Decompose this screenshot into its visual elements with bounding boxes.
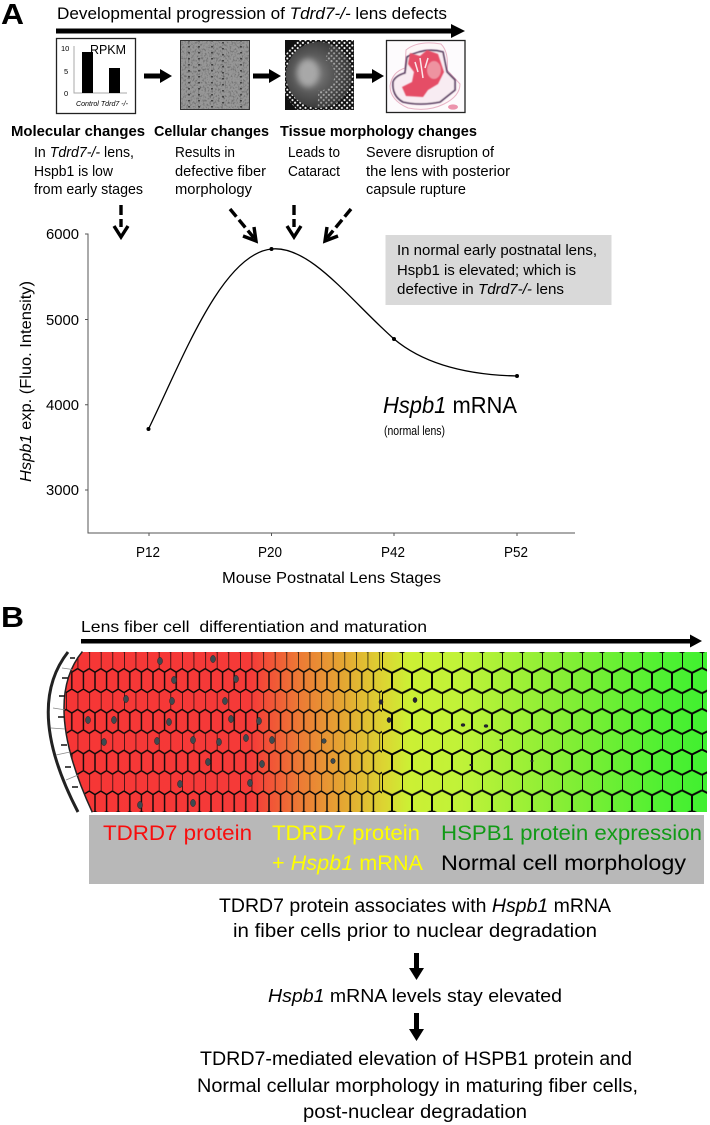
image: RPKM bar chart: 5: [64, 67, 68, 76]
text: cellular description: defective fiber: [175, 164, 266, 180]
legend: normal cell morphology: Normal cell morphology: [441, 851, 686, 875]
text: outcome: [197, 1049, 638, 1123]
x axis title: Mouse Postnatal Lens Stages: [222, 570, 441, 587]
heading: molecular changes: Molecular changes: [11, 123, 145, 140]
axes: [85, 234, 575, 536]
x axis tick labels: P52: [504, 545, 528, 561]
text: cellular description: [175, 145, 266, 198]
text: disruption description: Severe disruption of: [366, 145, 495, 161]
legend panel: [89, 815, 704, 884]
arrow: leads to HSPB1 protein: [409, 1013, 424, 1041]
series label: Hspb1 mRNA: [383, 392, 517, 418]
panel label B: B: [1, 602, 24, 634]
cell nuclei: [86, 655, 534, 809]
y axis tick labels: 5000: [46, 312, 79, 329]
arrow: leads to elevated mRNA: [409, 953, 424, 980]
x axis tick labels: P42: [381, 545, 405, 561]
data curve: [148, 249, 517, 429]
legend: HSPB1 protein expression: HSPB1 protein expression: [441, 821, 702, 845]
text: outcome: Normal cellular morphology in maturing fiber cells,: [197, 1076, 638, 1097]
image: RPKM bar chart: 0: [64, 89, 68, 98]
image: RPKM bar chart: Control Tdrd7 -/-: [76, 99, 128, 108]
legend: TDRD7 protein plus Hspb1 mRNA: [272, 821, 424, 875]
y axis tick labels: 3000: [46, 482, 79, 499]
text: cellular description: Results in: [175, 145, 235, 161]
arrow: molecular to cellular: [144, 69, 172, 83]
text: molecular description: Hspb1 is low: [34, 164, 114, 180]
line chart: Hspb1 mRNA in normal lens: [18, 226, 575, 587]
text: cataract description: Leads to: [288, 145, 340, 161]
image: cataract lens: [285, 40, 354, 110]
arrow: progression timeline: [56, 24, 465, 38]
text: Hspb1 mRNA stays elevated: Hspb1 mRNA levels stay elevated: [268, 985, 562, 1006]
dashed arrow: to P12: [114, 205, 128, 237]
callout: normal early postnatal lens: defective in Tdrd7-/- lens: [397, 282, 564, 298]
text: molecular description: In Tdrd7-/- lens,: [34, 145, 134, 161]
series sublabel: (normal lens): [384, 423, 445, 438]
text: outcome: TDRD7-mediated elevation of HSPB1 protein and: [200, 1049, 632, 1070]
text: outcome: post-nuclear degradation: [303, 1102, 527, 1123]
text: TDRD7 associates with Hspb1 mRNA: [219, 896, 611, 942]
image: RPKM bar chart: [56, 38, 136, 114]
text: molecular description: from early stages: [34, 182, 143, 198]
arrow: cellular to tissue: [253, 69, 281, 83]
diagram: lens fiber cells: [40, 652, 707, 812]
dashed arrow: to P20 top: [287, 205, 301, 237]
data points: [146, 247, 519, 431]
lens capsule and epithelium: [48, 652, 96, 812]
y axis tick labels: [46, 226, 79, 499]
callout: normal early postnatal lens: Hspb1 is elevated; which is: [397, 263, 576, 279]
panel A: developmental progression and Hspb1 chart: [1, 0, 612, 587]
heading: tissue morphology changes: Tissue morphology changes: [280, 123, 477, 140]
heading: lens fiber cell differentiation: Lens fiber cell differentiation and maturation: [81, 619, 427, 636]
text: disruption description: the lens with posterior: [366, 164, 510, 180]
image: ruptured lens histology: [386, 40, 465, 112]
heading: developmental progression: Developmental progression of Tdrd7-/- lens defects: [57, 5, 447, 23]
panel B: lens fiber cell differentiation: [1, 602, 707, 1123]
text: cataract description: Cataract: [288, 164, 340, 180]
dashed arrow: to P20 right: [325, 209, 351, 241]
arrow: tissue to rupture: [356, 69, 384, 83]
text: TDRD7 associates with Hspb1 mRNA: TDRD7 protein associates with Hspb1 mRNA: [219, 896, 611, 917]
arrow: maturation direction: [81, 634, 702, 648]
text: cataract description: [288, 145, 340, 180]
text: disruption description: capsule rupture: [366, 182, 466, 198]
callout: normal early postnatal lens: In normal early postnatal lens,: [397, 243, 597, 259]
legend: TDRD7 protein plus Hspb1 mRNA: TDRD7 protein: [272, 821, 420, 845]
x axis tick labels: P20: [258, 545, 282, 561]
image: fiber cell micrograph: [180, 40, 250, 110]
x axis tick labels: P12: [136, 545, 160, 561]
image: RPKM bar chart: 10: [61, 44, 69, 53]
heading: cellular changes: Cellular changes: [154, 123, 269, 140]
y axis title: Hspb1 exp. (Fluo. Intensity): [18, 281, 35, 482]
legend: TDRD7 protein plus Hspb1 mRNA: + Hspb1 mRNA: [272, 851, 424, 875]
text: molecular description: [34, 145, 143, 198]
legend: TDRD7 protein: TDRD7 protein: [103, 821, 252, 845]
fiber cell gradient and honeycomb: [40, 652, 707, 812]
text: disruption description: [366, 145, 510, 198]
y axis tick labels: 4000: [46, 397, 79, 414]
x axis tick labels: [136, 545, 528, 561]
text: cellular description: morphology: [175, 182, 253, 198]
y axis tick labels: 6000: [46, 226, 79, 243]
dashed arrow: to P20 left: [230, 209, 256, 241]
image: RPKM bar chart: RPKM: [90, 43, 126, 57]
text: TDRD7 associates with Hspb1 mRNA: in fiber cells prior to nuclear degradation: [233, 921, 597, 942]
callout: normal early postnatal lens: [386, 235, 612, 305]
